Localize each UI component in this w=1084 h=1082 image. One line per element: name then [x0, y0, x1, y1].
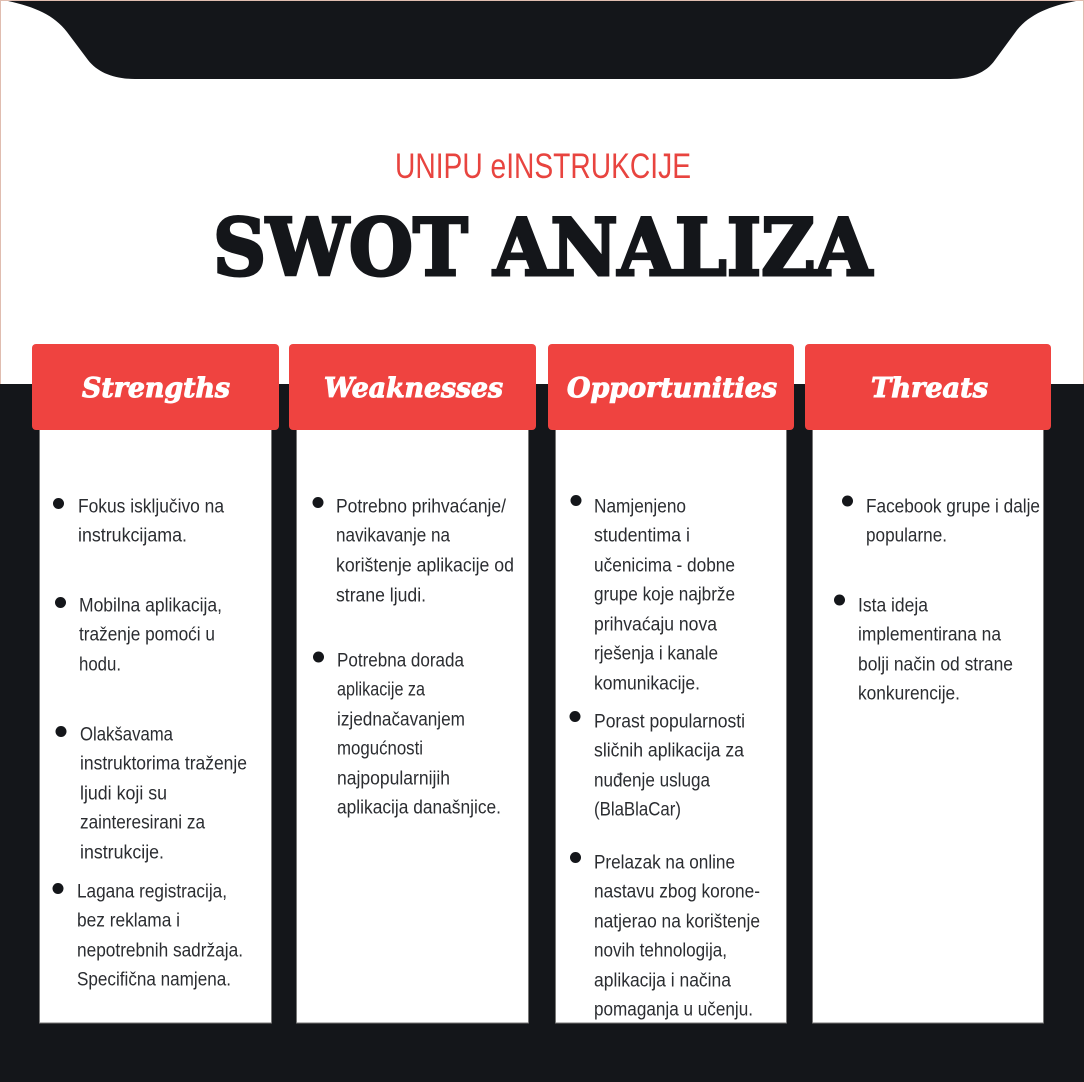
card: threats	[812, 425, 1044, 1023]
item: instructors: instrukcije.	[80, 842, 164, 864]
item: mobile app: Mobilna aplikacija,	[79, 596, 222, 616]
item: refinement: mogućnosti	[337, 738, 423, 760]
item: similar apps	[570, 711, 745, 820]
panel: opportunities	[548, 344, 794, 1023]
item: registration: Specifična namjena.	[77, 970, 231, 990]
item: focus: Fokus isključivo na	[78, 496, 224, 518]
header: strengths	[32, 344, 279, 430]
item: instructors: zainteresirani za	[80, 812, 205, 834]
page border	[0, 0, 1084, 384]
panel: weaknesses	[289, 344, 536, 1023]
item: competition: implementirana na	[858, 624, 1001, 646]
item: instructors: ljudi koji su	[80, 784, 167, 804]
item: adoption: korištenje aplikacije od	[336, 556, 514, 576]
item: refinement: aplikacije za	[337, 680, 425, 700]
item: adoption: Potrebno prihvaćanje/	[336, 496, 507, 518]
item: mobile app	[55, 596, 222, 676]
item: online teaching: nastavu zbog korone-	[594, 882, 760, 902]
item: registration: bez reklama i	[77, 910, 180, 932]
title: SWOT ANALIZA	[213, 201, 874, 294]
item: mobile app: traženje pomoći u	[79, 624, 215, 646]
item: similar apps: Porast popularnosti	[594, 712, 745, 732]
item: adoption: strane ljudi.	[336, 586, 426, 606]
header: threats	[805, 344, 1051, 430]
panel: threats	[805, 344, 1051, 1023]
header: strengths: Strengths	[82, 373, 230, 404]
item: competition: Ista ideja	[858, 596, 928, 616]
card: opportunities	[556, 425, 786, 1023]
item: competition: bolji način od strane	[858, 654, 1013, 676]
item: mobile app: hodu.	[79, 654, 121, 676]
item: refinement: najpopularnijih	[337, 768, 450, 790]
header: threats: Threats	[871, 373, 988, 404]
item: similar apps: (BlaBlaCar)	[594, 800, 681, 820]
item: target group: rješenja i kanale	[594, 644, 718, 664]
item: target group: prihvaćaju nova	[594, 614, 717, 636]
header: weaknesses: Weaknesses	[324, 373, 503, 404]
card: strengths	[40, 425, 272, 1023]
item: refinement	[313, 650, 501, 818]
item: focus: instrukcijama.	[78, 526, 187, 546]
item: registration: Lagana registracija,	[77, 882, 227, 902]
item: competition: konkurencije.	[858, 684, 960, 704]
item: target group: učenicima - dobne	[594, 556, 735, 576]
item: online teaching: aplikacija i načina	[594, 970, 731, 992]
card: weaknesses	[296, 425, 528, 1023]
item: instructors	[56, 724, 247, 864]
item: instructors: instruktorima traženje	[80, 754, 247, 774]
item: competition	[834, 594, 1013, 704]
header: opportunities: Opportunities	[567, 373, 777, 404]
panel: strengths	[32, 344, 279, 1023]
item: online teaching: Prelazak na online	[594, 852, 735, 874]
item: facebook groups: Facebook grupe i dalje	[866, 496, 1040, 518]
item: online teaching: novih tehnologija,	[594, 940, 727, 962]
item: facebook groups: popularne.	[866, 526, 947, 546]
item: adoption	[312, 496, 514, 606]
top dark curved shape	[8, 1, 1076, 79]
item: online teaching: natjerao na korištenje	[594, 912, 760, 932]
item: target group	[570, 495, 735, 694]
subtitle: UNIPU eINSTRUKCIJE	[395, 147, 691, 186]
item: adoption: navikavanje na	[336, 526, 450, 546]
item: target group: grupe koje najbrže	[594, 584, 735, 606]
header: opportunities	[548, 344, 794, 430]
item: focus	[53, 496, 224, 546]
header: weaknesses	[289, 344, 536, 430]
item: online teaching: pomaganja u učenju.	[594, 1000, 753, 1020]
item: registration: nepotrebnih sadržaja.	[77, 940, 243, 962]
item: target group: studentima i	[594, 526, 690, 546]
item: facebook groups	[842, 496, 1040, 546]
item: registration	[52, 882, 243, 990]
item: online teaching	[570, 852, 760, 1020]
dark footer band	[0, 384, 1084, 1082]
item: refinement: izjednačavanjem	[337, 710, 465, 730]
item: similar apps: nuđenje usluga	[594, 770, 710, 792]
item: target group: Namjenjeno	[594, 496, 686, 518]
item: refinement: Potrebna dorada	[337, 650, 464, 672]
item: similar apps: sličnih aplikacija za	[594, 740, 744, 762]
item: instructors: Olakšavama	[80, 724, 173, 746]
item: target group: komunikacije.	[594, 674, 700, 694]
item: refinement: aplikacija današnjice.	[337, 798, 501, 818]
